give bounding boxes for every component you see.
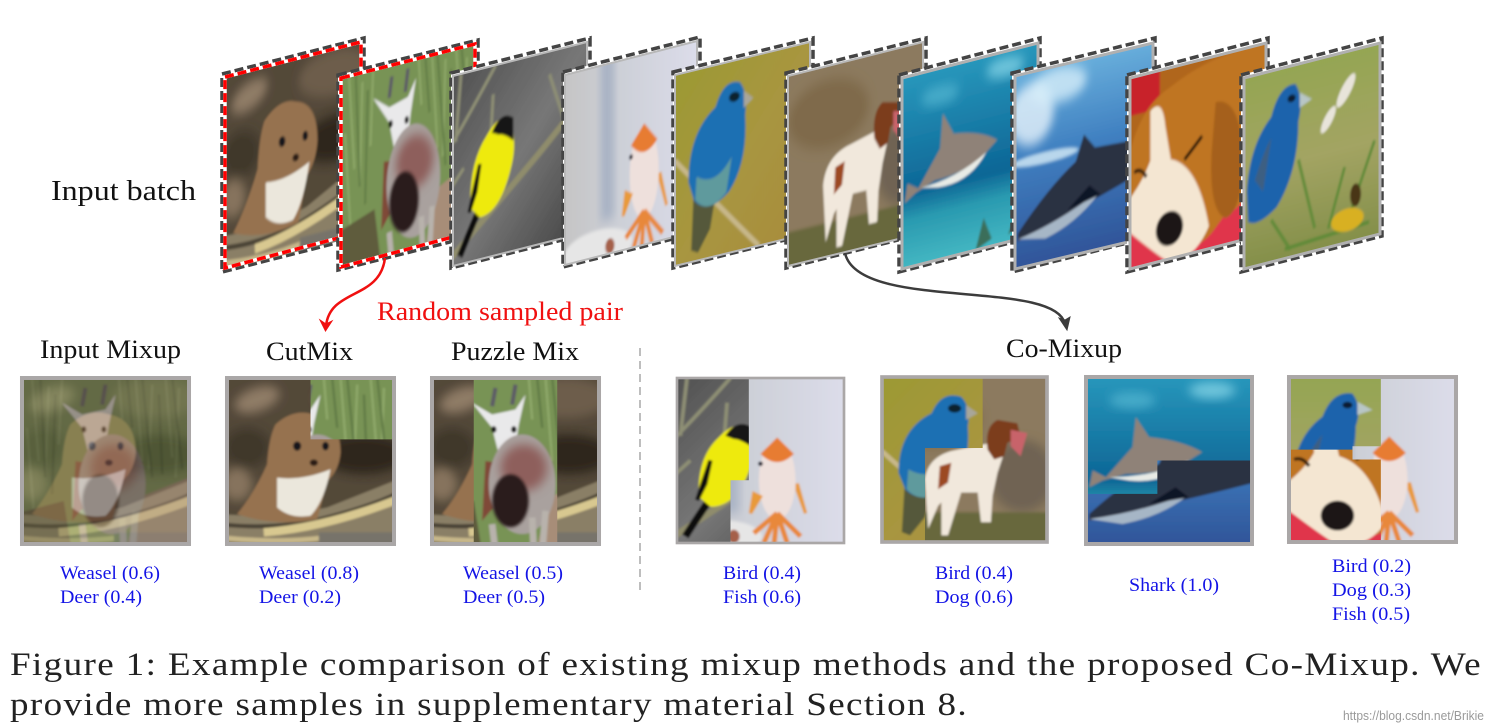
labels: Input Mixup: Weasel (0.6): [60, 564, 160, 584]
labels: Input Mixup: [60, 564, 160, 608]
labels: Puzzle Mix: Weasel (0.5): [463, 564, 563, 584]
panel: CutMix result: [225, 376, 396, 546]
image card: white and brown dog: [784, 36, 928, 270]
labels: Co-Mixup bird and fish: Fish (0.6): [723, 588, 801, 608]
labels: CutMix: Weasel (0.8): [259, 564, 359, 584]
heading: Puzzle Mix: Puzzle Mix: [451, 336, 579, 366]
divider between existing methods and Co-Mixup: [639, 348, 641, 590]
image card: goldfish: [561, 36, 702, 268]
red label: random sampled pair: Random sampled pair: [377, 297, 623, 326]
labels: Input Mixup: Deer (0.4): [60, 588, 142, 608]
labels: Puzzle Mix: [463, 564, 563, 608]
heading: Input Mixup: Input Mixup: [40, 334, 181, 364]
heading: CutMix: CutMix: [266, 336, 353, 366]
input batch image stack: [220, 36, 1384, 274]
input batch label: Input batch: [51, 175, 197, 207]
panel: Co-Mixup sharks: [1084, 375, 1254, 546]
labels: Co-Mixup bird, dog and fish: Fish (0.5): [1332, 605, 1410, 625]
arrow: dark, input batch to Co-Mixup: [845, 253, 1070, 330]
labels: Co-Mixup bird, dog and fish: Bird (0.2): [1332, 557, 1411, 577]
labels: Co-Mixup bird, dog and fish: [1332, 557, 1411, 625]
image card: sleeping beagle: [1125, 36, 1270, 274]
panel: Puzzle Mix result: [430, 376, 601, 546]
labels: Co-Mixup bird and dog: Bird (0.4): [935, 564, 1013, 584]
labels: Co-Mixup bird and fish: Bird (0.4): [723, 564, 801, 584]
panel: Input Mixup result: [20, 376, 191, 546]
figure caption: provide more samples in supplementary material Section 8.: [10, 687, 968, 723]
image card: deer with red outline: [336, 38, 480, 272]
image card: blue bird in grass: [1239, 36, 1384, 274]
image card: weasel with red outline: [220, 36, 366, 274]
labels: Puzzle Mix: Deer (0.5): [463, 588, 545, 608]
image card: shark over sand: [897, 36, 1042, 274]
labels: CutMix: [259, 564, 359, 608]
panel: Co-Mixup bird and fish: [676, 376, 846, 544]
panel: Co-Mixup bird and dog: [880, 375, 1049, 544]
labels: Co-Mixup bird and dog: Dog (0.6): [935, 588, 1013, 608]
image card: shark under sunlight: [1010, 36, 1157, 273]
figure caption: Figure 1: Example comparison of existing mixup methods and the proposed Co-Mixup. We: [10, 647, 1482, 683]
heading: Co-Mixup: Co-Mixup: [1006, 333, 1122, 363]
figure caption: [10, 647, 1482, 723]
labels: CutMix: Deer (0.2): [259, 588, 341, 608]
arrow: red, random sampled pair to CutMix: [320, 258, 385, 331]
panel: Co-Mixup bird, dog and fish: [1287, 375, 1458, 544]
image card: goldfinch: [449, 36, 592, 270]
labels: Co-Mixup bird and fish: [723, 564, 801, 608]
label: Co-Mixup shark: Shark (1.0): [1129, 576, 1219, 596]
image card: blue bird on branch: [671, 36, 815, 270]
labels: Co-Mixup bird, dog and fish: Dog (0.3): [1332, 581, 1411, 601]
labels: Co-Mixup bird and dog: [935, 564, 1013, 608]
